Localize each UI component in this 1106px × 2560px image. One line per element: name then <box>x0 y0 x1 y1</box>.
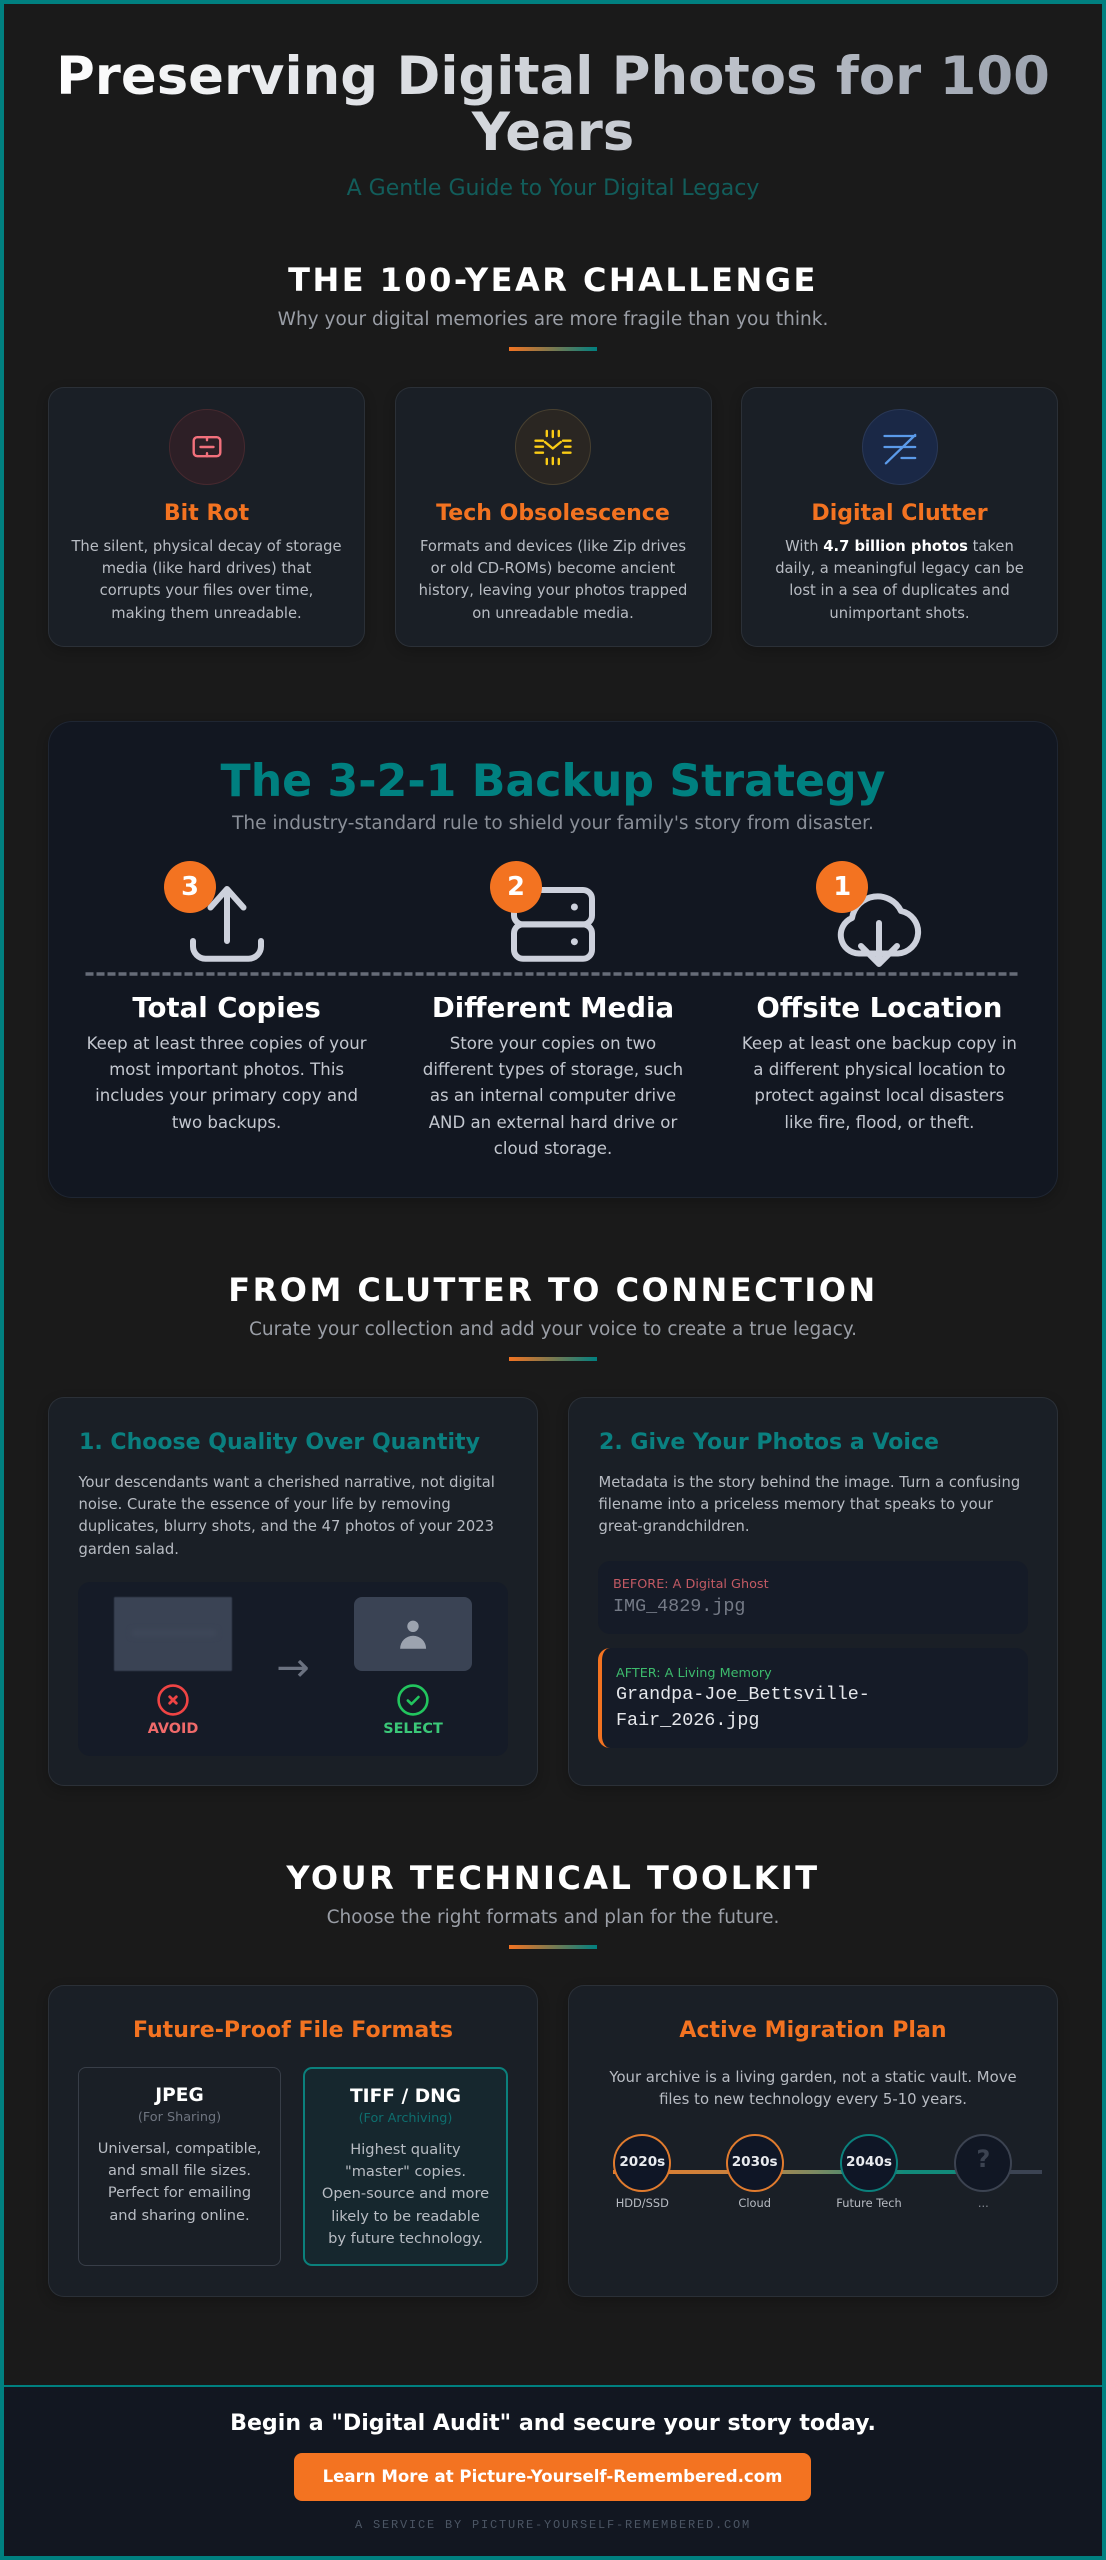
label: select: SELECT <box>383 1721 443 1737</box>
icon: upload <box>190 886 264 962</box>
format card: JPEG: (For Sharing) <box>138 2110 221 2125</box>
node: 2030s: Cloud <box>738 2196 771 2210</box>
panel: file formats <box>48 1985 538 2297</box>
format card: TIFF / DNG: "master" copies. <box>345 2163 466 2180</box>
heading: 3-2-1: The 3-2-1 Backup Strategy <box>221 756 885 807</box>
panel: give photos a voice <box>568 1397 1058 1786</box>
timeline <box>613 2170 1042 2174</box>
arrow: → <box>276 1645 310 1691</box>
text: tech obsolescence description: history, leaving your photos trapped <box>419 582 687 599</box>
section heading: clutter to connection: FROM CLUTTER TO CONNECTION <box>228 1271 878 1309</box>
node: 2030s: 2030s <box>732 2154 778 2170</box>
heading: bit rot: Bit Rot <box>164 501 249 526</box>
icon: avoid <box>157 1684 189 1716</box>
blurred photo <box>114 1597 232 1671</box>
node: 2020s: HDD/SSD <box>616 2196 669 2210</box>
text: bit rot description <box>71 538 342 622</box>
text: clutter description <box>775 538 1024 622</box>
icon: server <box>511 887 595 962</box>
column: offsite location: like fire, flood, or theft. <box>784 1113 974 1132</box>
column: total copies: most important photos. This <box>109 1060 344 1079</box>
text: migration description: files to new technology every 5-10 years. <box>659 2090 967 2108</box>
column: offsite location: protect against local disasters <box>754 1086 1004 1105</box>
format card: TIFF / DNG: by future technology. <box>328 2230 483 2247</box>
section heading: toolkit: YOUR TECHNICAL TOOLKIT <box>286 1859 820 1897</box>
text: tech obsolescence description: Formats and devices (like Zip drives <box>420 538 686 555</box>
panel: digital clutter <box>741 387 1058 647</box>
icon: select <box>397 1684 429 1716</box>
column: different media: Store your copies on two <box>450 1034 656 1053</box>
node: 2030s <box>726 2134 784 2210</box>
column: total copies: two backups. <box>172 1113 281 1132</box>
column: different media: AND an external hard drive or <box>429 1113 677 1132</box>
text: clutter description: unimportant shots. <box>829 605 970 622</box>
heading: quality: 1. Choose Quality Over Quantity <box>79 1430 480 1455</box>
before box <box>598 1561 1028 1634</box>
text: clutter description: lost in a sea of duplicates and <box>789 582 1010 599</box>
before box: BEFORE: A Digital Ghost <box>613 1577 769 1592</box>
icon: clutter <box>862 409 938 485</box>
text: bit rot description: making them unreadable. <box>111 605 302 622</box>
text: quality description: noise. Curate the essence of your life by removing <box>78 1496 451 1513</box>
title <box>48 49 1058 160</box>
icon: person <box>400 1620 426 1649</box>
format card: TIFF / DNG: (For Archiving) <box>359 2111 452 2126</box>
title: Preserving Digital Photos for 100 <box>56 46 1050 107</box>
text: clutter description: daily, a meaningful legacy can be <box>775 560 1024 577</box>
column: different media: as an internal computer drive <box>430 1086 676 1105</box>
node: 2020s <box>613 2134 671 2210</box>
badge: 2: 2 <box>507 872 525 902</box>
heading: migration: Active Migration Plan <box>679 2018 947 2043</box>
node: unknown: ? <box>976 2145 990 2173</box>
column: total copies: includes your primary copy and <box>95 1086 358 1105</box>
column: different media: Different Media <box>432 991 674 1024</box>
text: tech obsolescence description: or old CD-ROMs) become ancient <box>431 560 675 577</box>
text: quality description: Your descendants want a cherished narrative, not digital <box>78 1474 495 1491</box>
text: bit rot description: media (like hard drives) that <box>102 560 311 577</box>
heading: digital clutter: Digital Clutter <box>811 501 988 526</box>
button: Learn More at Picture-Yourself-Remembered.com <box>323 2467 782 2486</box>
badge: 1: 1 <box>833 872 851 902</box>
node: unknown <box>954 2134 1012 2210</box>
format card: TIFF / DNG: Highest quality <box>350 2141 461 2158</box>
icon: cloud download <box>838 893 922 967</box>
service note: A SERVICE BY PICTURE-YOURSELF-REMEMBERED.COM <box>355 2518 751 2532</box>
column: offsite location: Offsite Location <box>756 991 1002 1024</box>
section heading: challenge <box>278 261 828 351</box>
heading: voice: 2. Give Your Photos a Voice <box>599 1430 939 1455</box>
column: offsite location <box>742 991 1017 1132</box>
format card: TIFF / DNG <box>303 2067 508 2266</box>
panel: tech obsolescence <box>394 387 712 647</box>
badge: 3: 3 <box>181 872 199 902</box>
section heading: toolkit: Choose the right formats and plan for the future. <box>327 1907 779 1928</box>
text: tech obsolescence description <box>419 538 687 622</box>
title: Years <box>472 102 634 163</box>
text: bit rot description: The silent, physical decay of storage <box>71 538 342 555</box>
comparison box: avoid vs select <box>78 1582 508 1756</box>
sharp photo <box>354 1597 472 1671</box>
format card: JPEG: Perfect for emailing <box>108 2184 251 2201</box>
node: unknown: ... <box>978 2196 989 2210</box>
section heading: challenge: Why your digital memories are more fragile than you think. <box>278 309 828 330</box>
heading: tech obsolescence: Tech Obsolescence <box>436 501 670 526</box>
text: voice description: Metadata is the story behind the image. Turn a confusing <box>598 1474 1020 1491</box>
panel: bit rot <box>48 387 365 647</box>
format card: TIFF / DNG: TIFF / DNG <box>350 2086 461 2107</box>
text: tech obsolescence description: on unreadable media. <box>472 605 634 622</box>
text: migration description: Your archive is a living garden, not a static vault. Move <box>609 2068 1017 2086</box>
panel: 3-2-1 backup strategy <box>48 721 1058 1198</box>
format card: JPEG: and small file sizes. <box>108 2162 251 2179</box>
node: 2020s: 2020s <box>619 2154 665 2170</box>
text: voice description: filename into a priceless memory that speaks to your <box>598 1496 993 1513</box>
heading: formats: Future-Proof File Formats <box>133 2018 453 2043</box>
text: voice description <box>598 1474 1020 1535</box>
text: quality description: garden salad. <box>78 1541 179 1558</box>
badge: 3 <box>164 861 216 913</box>
section heading: toolkit <box>286 1859 820 1949</box>
text: bit rot description: corrupts your files over time, <box>100 582 313 599</box>
icon: chip <box>515 409 591 485</box>
format card: TIFF / DNG: likely to be readable <box>331 2208 480 2225</box>
subheading: 3-2-1: The industry-standard rule to shield your family's story from disaster. <box>232 813 874 834</box>
node: 2040s <box>836 2134 902 2210</box>
format card: JPEG: and sharing online. <box>109 2207 250 2224</box>
before box: IMG_4829.jpg <box>613 1596 745 1617</box>
subtitle: A Gentle Guide to Your Digital Legacy <box>347 176 759 201</box>
footer <box>0 2385 1106 2560</box>
node: 2040s: Future Tech <box>836 2196 902 2210</box>
after box: Fair_2026.jpg <box>616 1710 759 1731</box>
footer heading: Begin a "Digital Audit" and secure your story today. <box>230 2410 876 2436</box>
text: quality description <box>78 1474 495 1558</box>
text: quality description: duplicates, blurry shots, and the 47 photos of your 2023 <box>78 1518 494 1535</box>
format card: JPEG: JPEG <box>155 2085 204 2106</box>
button <box>294 2453 811 2501</box>
after box: AFTER: A Living Memory <box>616 1666 772 1681</box>
text: clutter description: With 4.7 billion photos taken <box>785 538 1014 555</box>
badge: 1 <box>816 861 868 913</box>
panel: migration plan <box>568 1985 1058 2297</box>
column: offsite location: Keep at least one backup copy in <box>742 1034 1017 1053</box>
format card: JPEG <box>78 2067 281 2266</box>
format card: JPEG: Universal, compatible, <box>98 2140 261 2157</box>
column: offsite location: a different physical location to <box>753 1060 1006 1079</box>
column: different media: different types of storage, such <box>423 1060 683 1079</box>
node: 2040s: 2040s <box>846 2154 892 2170</box>
column: total copies: Keep at least three copies of your <box>87 1034 367 1053</box>
text: voice description: great-grandchildren. <box>598 1518 750 1535</box>
panel: quality over quantity <box>48 1397 538 1786</box>
column: total copies <box>87 991 367 1132</box>
section heading: clutter to connection: Curate your collection and add your voice to create a true legacy. <box>249 1319 857 1340</box>
label: avoid: AVOID <box>148 1721 198 1737</box>
text: migration description <box>609 2068 1017 2108</box>
column: different media: cloud storage. <box>494 1139 612 1158</box>
after box: Grandpa-Joe_Bettsville- <box>616 1684 870 1705</box>
section heading: challenge: THE 100-YEAR CHALLENGE <box>288 261 818 299</box>
section heading: clutter to connection <box>228 1271 878 1361</box>
badge: 2 <box>490 861 542 913</box>
after box <box>598 1648 1028 1748</box>
icon: bit rot <box>169 409 245 485</box>
format card: TIFF / DNG: Open-source and more <box>322 2185 489 2202</box>
column: total copies: Total Copies <box>132 991 321 1024</box>
column: different media <box>423 991 683 1158</box>
